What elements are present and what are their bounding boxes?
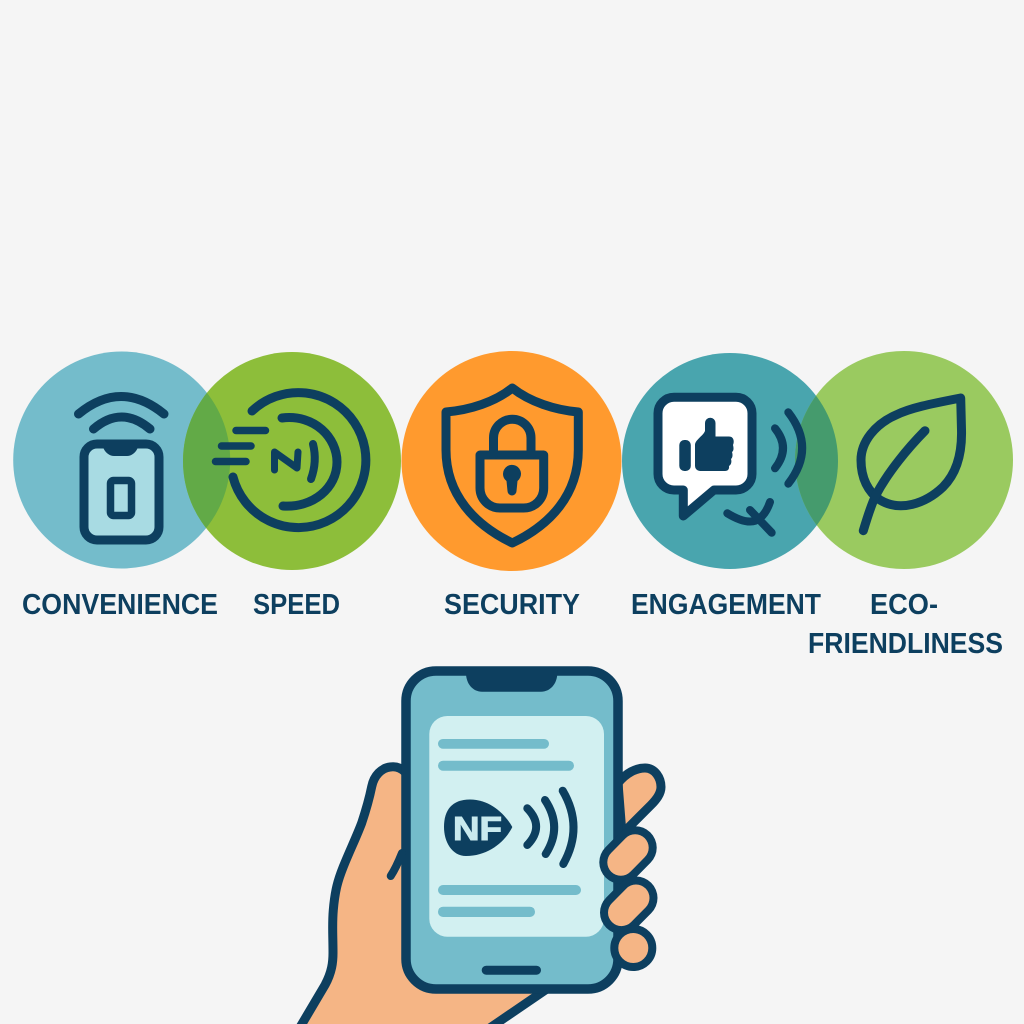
thumb crease [391,853,402,876]
finger 3 [622,898,636,913]
finger 2 [621,848,635,862]
label: speed: SPEED [253,589,340,621]
panel: security circle [402,351,622,571]
phone body [406,671,618,989]
NFC badge [444,800,512,856]
top finger [618,768,661,834]
icon: phone with wireless waves [78,396,164,540]
label: eco-friendliness: FRIENDLINESS [808,628,1003,660]
icon: leaf [861,398,962,531]
home bar [482,966,541,975]
label: eco-friendliness: ECO- [870,589,938,621]
phone notch [466,670,557,692]
text line 3 [438,885,581,895]
hand palm and thumb [296,767,560,1024]
label: security: SECURITY [444,589,580,621]
panel: convenience circle [13,352,230,568]
overlap: convenience and speed [183,392,230,528]
phone screen card [429,716,604,937]
label: engagement: ENGAGEMENT [631,589,821,621]
illustration: hand holding phone [296,670,661,1024]
NFC badge: NF [453,810,502,847]
overlap: engagement and eco-friendliness [795,396,838,526]
finger 4 [614,929,652,967]
icon: shield with padlock [446,388,578,543]
icon: speech bubble with thumbs up [658,397,802,533]
infographic canvas [13,351,1013,1024]
text line 4 [438,907,535,917]
panel: eco-friendliness circle [795,351,1013,569]
label: convenience: CONVENIENCE [22,589,218,621]
text line 1 [438,739,549,749]
text line 2 [438,761,574,771]
panel: speed circle [183,352,401,570]
NFC waves [527,791,574,864]
icon: fast NFC tap [216,393,366,528]
panel: engagement circle [622,353,838,569]
